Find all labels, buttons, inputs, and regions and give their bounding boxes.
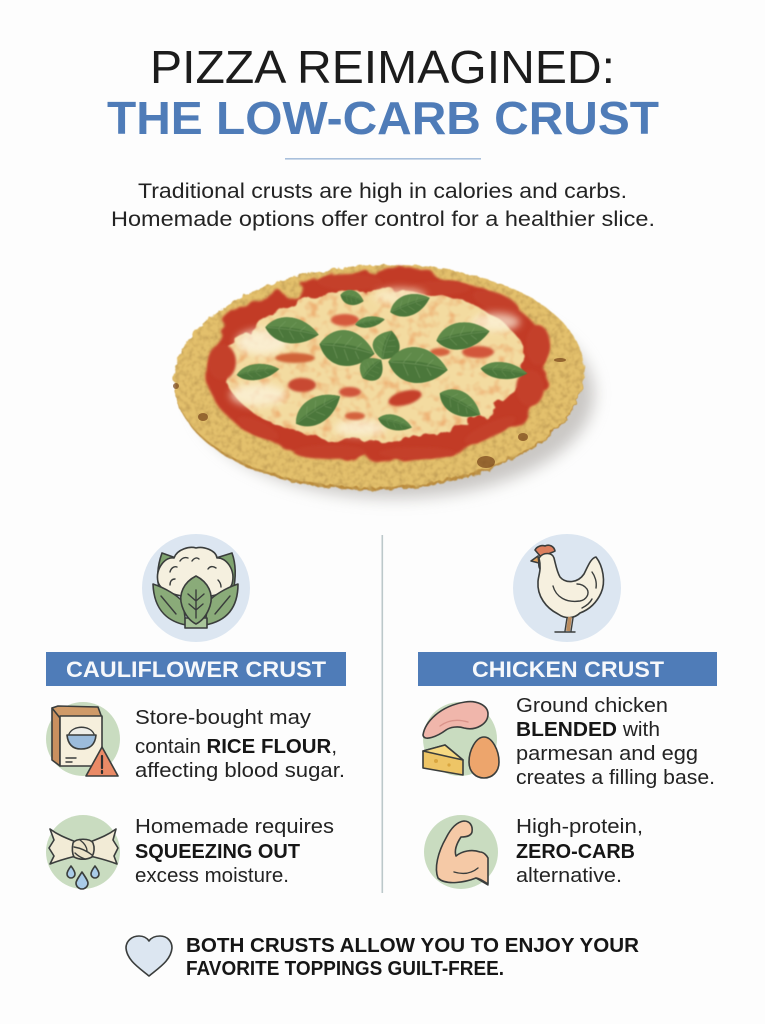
icon: cauliflower (142, 534, 250, 642)
icon: chicken breast, cheese and egg (423, 702, 499, 778)
intro text: Homemade options offer control for a healthier slice. (111, 208, 655, 231)
cheese highlights (230, 288, 520, 436)
text: rice flour: affecting blood sugar. (135, 759, 345, 782)
icon: squeezed cloth (46, 815, 120, 889)
intro text (111, 180, 655, 231)
crust underside (171, 261, 587, 497)
footer text (186, 934, 639, 980)
text: blended: BLENDED with (516, 718, 660, 741)
text: blended (516, 694, 715, 789)
text: squeezing out: excess moisture. (135, 864, 289, 887)
basil leaves (236, 288, 528, 434)
footer text: FAVORITE TOPPINGS GUILT-FREE. (186, 957, 504, 980)
crust (170, 258, 588, 494)
text: squeezing out: Homemade requires (135, 815, 334, 838)
title: PIZZA REIMAGINED: (150, 41, 615, 93)
title (107, 41, 659, 144)
icon: chicken (513, 534, 621, 642)
crust browning (173, 358, 566, 468)
text: blended: creates a filling base. (516, 766, 715, 789)
text: zero-carb (516, 815, 643, 887)
panel: chicken crust (418, 534, 717, 889)
pizza illustration (170, 258, 594, 498)
text: rice flour: contain RICE FLOUR, (135, 735, 337, 758)
text: rice flour (135, 706, 345, 782)
icon: heart (126, 936, 172, 976)
panel: cauliflower crust (46, 534, 346, 889)
chicken heading bar: CHICKEN CRUST (472, 657, 665, 682)
icon: flexed arm (424, 815, 498, 889)
cauliflower heading bar: CAULIFLOWER CRUST (66, 657, 327, 682)
text: zero-carb: ZERO-CARB (516, 840, 635, 863)
text: blended: parmesan and egg (516, 742, 698, 765)
tomato sauce (203, 267, 553, 467)
footer text: BOTH CRUSTS ALLOW YOU TO ENJOY YOUR (186, 934, 639, 957)
sauce spots (275, 314, 494, 420)
text: zero-carb: alternative. (516, 864, 622, 887)
melted cheese (222, 284, 528, 446)
text: squeezing out: SQUEEZING OUT (135, 840, 300, 863)
chicken heading bar (418, 652, 717, 686)
callout: footer message (126, 934, 639, 980)
text: squeezing out (135, 815, 334, 887)
title: THE LOW-CARB CRUST (107, 92, 659, 144)
sauce showing at the cheese edge (208, 274, 550, 459)
text: rice flour: Store-bought may (135, 706, 312, 729)
text: zero-carb: High-protein, (516, 815, 643, 838)
intro text: Traditional crusts are high in calories and carbs. (138, 180, 627, 203)
text: blended: Ground chicken (516, 694, 668, 717)
cauliflower heading bar (46, 652, 346, 686)
icon: flour box with warning (46, 702, 120, 776)
